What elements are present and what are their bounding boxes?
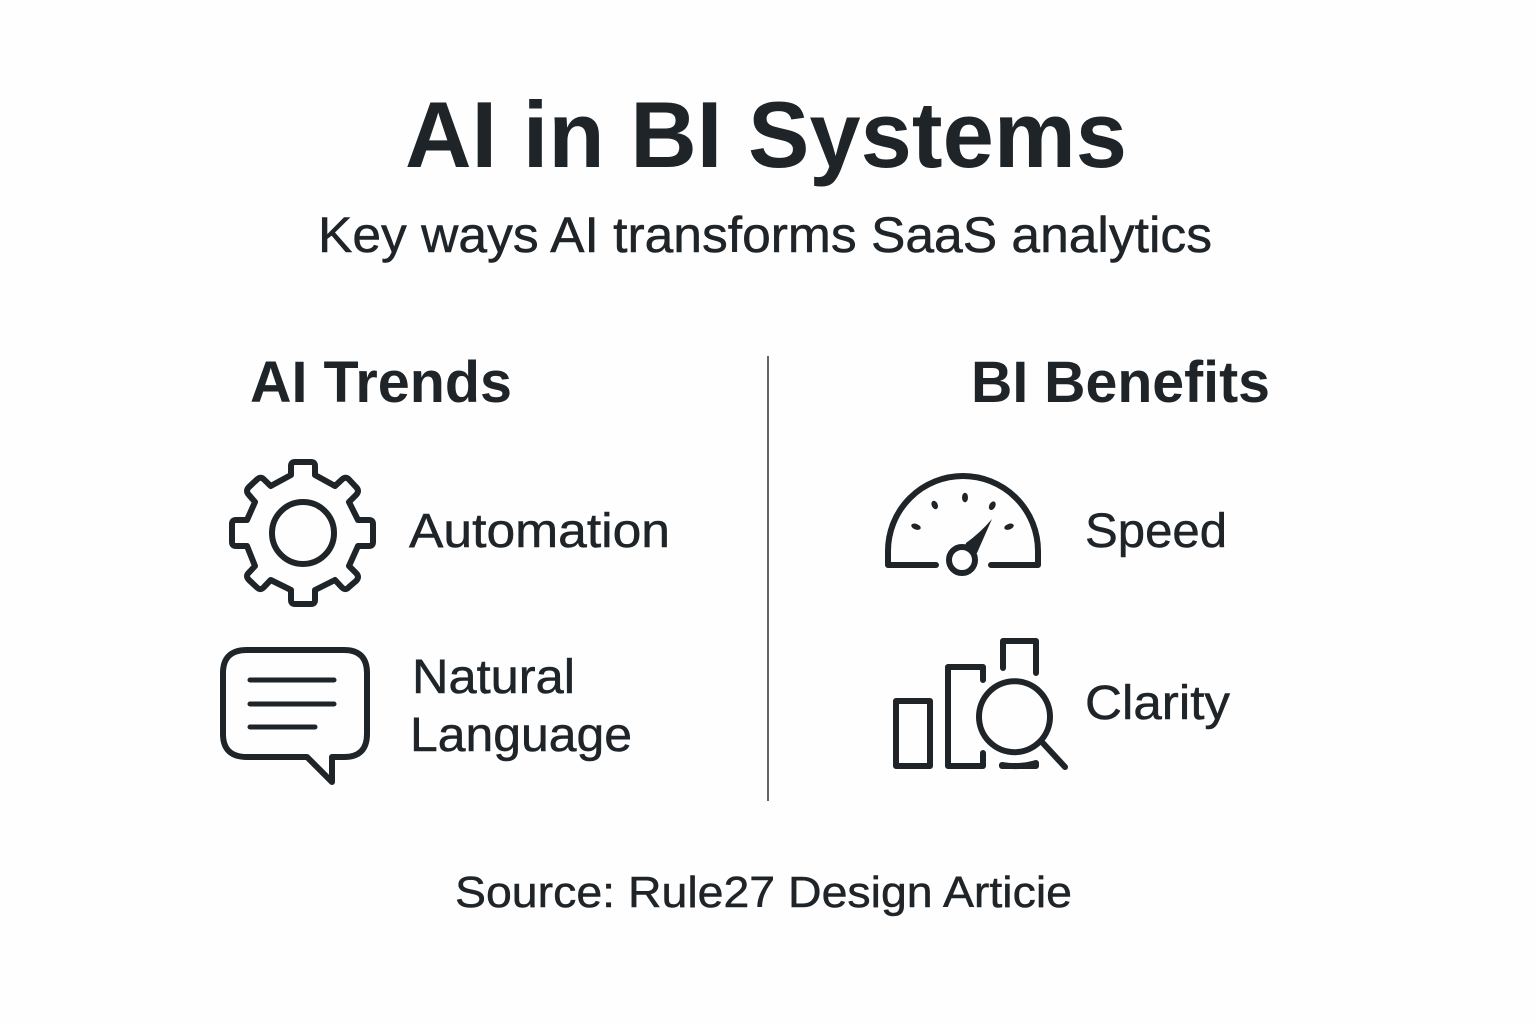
heading: AI Trends: AI Trends [250,350,512,415]
label: Natural Language: Language [410,709,632,762]
divider [767,356,769,801]
label: Automation: Automation [409,505,670,558]
subtitle: Key ways AI transforms SaaS analytics [318,207,1212,263]
icon: speedometer [888,476,1038,573]
icon: bar chart with magnifier [896,641,1065,767]
heading: BI Benefits: BI Benefits [971,350,1270,415]
label: Speed: Speed [1085,505,1227,558]
title: AI in BI Systems [405,82,1127,187]
label: Natural Language [410,651,632,762]
icon: speech bubble [223,650,367,782]
label: Natural Language: Natural [412,651,575,704]
source note: Source: Rule27 Design Articie [455,868,1072,917]
panel: AI Trends [223,350,670,782]
icon: gear [232,462,373,604]
panel: BI Benefits [888,350,1270,767]
label: Clarity: Clarity [1085,677,1230,730]
